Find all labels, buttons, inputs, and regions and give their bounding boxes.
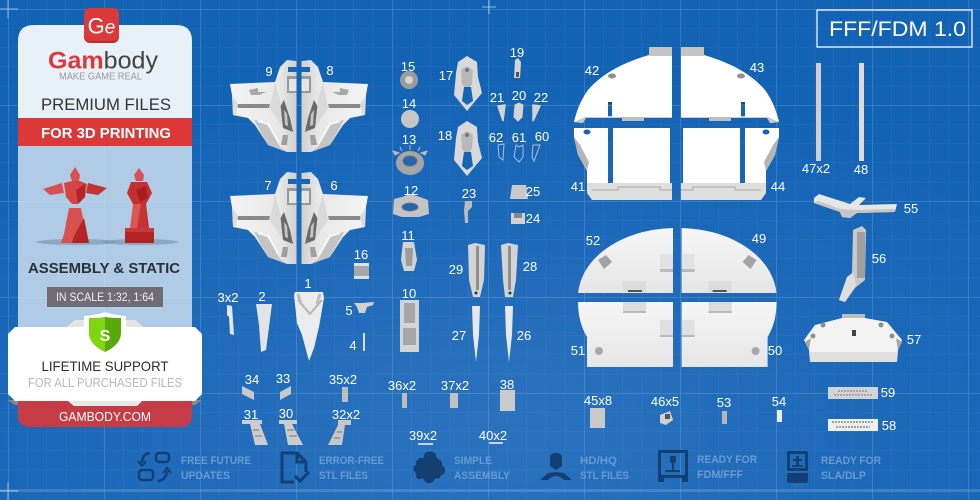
parts: heads 17 and 18: [454, 56, 482, 176]
part number labels: 27: [452, 328, 466, 343]
part number labels: 36x2: [388, 378, 416, 393]
part number labels: 35x2: [329, 372, 357, 387]
icon: update arrows: [138, 453, 171, 481]
part number labels: 31: [244, 407, 258, 422]
icon: helmet bust: [540, 453, 572, 480]
parts: small pieces 19 to 25 and 60 to 62: [464, 58, 540, 224]
scale tag: IN SCALE 1:32, 1:64: [56, 292, 155, 304]
version badge: [817, 10, 972, 47]
part number labels: 39x2: [409, 428, 437, 443]
text: for all purchased files: FOR ALL PURCHASED FILES: [28, 376, 182, 390]
part number labels: 44: [771, 179, 785, 194]
feature: ready for SLA/DLP: SLA/DLP: [821, 470, 866, 482]
feature: ready for SLA/DLP: READY FOR: [821, 455, 881, 467]
parts: small items 45, 46, 53, 54, 58, 59: [590, 387, 878, 431]
feature: simple assembly: [413, 452, 511, 483]
part number labels: 17: [439, 68, 453, 83]
version badge: FFF/FDM 1.0: [829, 18, 966, 41]
part number labels: 53: [717, 395, 731, 410]
part number labels: 6: [330, 178, 338, 193]
feature: HD/HQ STL files: STL FILES: [580, 470, 629, 482]
part number labels: 46x5: [651, 394, 679, 409]
part number labels: 4: [349, 338, 357, 353]
part number labels: 8: [326, 63, 334, 78]
part number labels: 18: [438, 128, 452, 143]
part number labels: 21: [490, 90, 504, 105]
banner: for 3D printing: FOR 3D PRINTING: [41, 125, 171, 142]
part number labels: 61: [512, 130, 526, 145]
scale tag: [47, 287, 163, 307]
part number labels: 50: [768, 343, 782, 358]
part number labels: 25: [526, 184, 540, 199]
icon: red low-poly figure standing: [102, 168, 178, 245]
part number labels: 32x2: [332, 407, 360, 422]
part number labels: 28: [523, 259, 537, 274]
part number labels: 48: [854, 162, 868, 177]
feature: ready for FDM/FFF: FDM/FFF: [697, 469, 743, 481]
heading: premium files: PREMIUM FILES: [41, 96, 171, 114]
feature: HD/HQ STL files: [540, 453, 629, 482]
part number labels: 49: [752, 231, 766, 246]
part number labels: 29: [449, 262, 463, 277]
part number labels: 10: [402, 286, 416, 301]
parts: wing sections 6 to 9: [230, 60, 368, 264]
part number labels: 33: [276, 371, 290, 386]
part number labels: 57: [907, 332, 921, 347]
feature: simple assembly: ASSEMBLY: [454, 470, 511, 482]
panel: brand card: [18, 8, 192, 336]
part number labels: 30: [279, 406, 293, 421]
part number labels: 3x2: [218, 290, 238, 305]
part number labels: 51: [571, 343, 585, 358]
part number labels: 9: [265, 64, 273, 79]
parts: blades 26 to 29: [468, 243, 518, 362]
panel: gambody.com footer: GAMBODY.COM: [59, 410, 151, 424]
part number labels: 41: [571, 179, 585, 194]
feature: error-free STL files: STL FILES: [319, 470, 368, 482]
part number labels: [218, 45, 921, 443]
parts: front pieces 1 to 5: [227, 292, 374, 361]
feature: ready for SLA/DLP: [787, 451, 881, 483]
part number labels: 34: [245, 372, 259, 387]
icon: red low-poly figure arms open: [36, 167, 116, 245]
part number labels: 11: [401, 228, 415, 243]
panel: gambody.com footer: [8, 400, 202, 427]
icon: Ge logo: [84, 8, 119, 43]
feature: HD/HQ STL files: HD/HQ: [580, 455, 617, 467]
panel: lifetime support: [8, 312, 202, 406]
part number labels: 62: [489, 130, 503, 145]
icon: Ge logo: Ge: [88, 14, 115, 38]
tagline: MAKE GAME REAL: [59, 72, 142, 82]
part number labels: 37x2: [441, 378, 469, 393]
part number labels: 22: [534, 90, 548, 105]
part number labels: 58: [882, 418, 896, 433]
part number labels: 14: [402, 96, 416, 111]
part number labels: 54: [772, 394, 786, 409]
icon: green shield: S: [100, 328, 111, 345]
part number labels: 56: [872, 251, 886, 266]
parts: lower row 30 to 40: [242, 386, 515, 445]
icon: file with check: [282, 453, 309, 482]
icon: FDM printer: [658, 450, 688, 482]
feature: error-free STL files: ERROR-FREE: [319, 455, 384, 467]
banner: for 3D printing: [18, 118, 192, 146]
part number labels: 23: [462, 186, 476, 201]
feature: ready for FDM/FFF: [658, 450, 757, 482]
part number labels: 26: [517, 328, 531, 343]
icon: SLA printer: [787, 451, 808, 483]
part number labels: 1: [304, 276, 312, 291]
part number labels: 2: [258, 289, 266, 304]
icon: puzzle piece: [413, 452, 445, 483]
logo wordmark: Gambody: [48, 48, 158, 74]
part number labels: 16: [354, 247, 368, 262]
part number labels: 47x2: [802, 161, 830, 176]
part number labels: 55: [904, 201, 918, 216]
parts: column 10 to 16: [354, 71, 429, 352]
heading: assembly and static: ASSEMBLY & STATIC: [28, 261, 181, 277]
part number labels: 45x8: [584, 393, 612, 408]
part number labels: 15: [401, 59, 415, 74]
part number labels: 24: [526, 211, 540, 226]
part number labels: 60: [535, 129, 549, 144]
part number labels: 43: [750, 60, 764, 75]
parts: dome sections 41 to 44: [574, 47, 779, 200]
part number labels: 19: [510, 45, 524, 60]
feature: simple assembly: SIMPLE: [454, 455, 492, 467]
feature: free future updates: [138, 453, 251, 482]
part number labels: 38: [500, 377, 514, 392]
part number labels: 40x2: [479, 428, 507, 443]
part number labels: 13: [402, 132, 416, 147]
icon: green shield: [84, 312, 126, 358]
part number labels: 7: [264, 178, 272, 193]
parts: floor plates 49 to 52: [578, 228, 777, 367]
feature: error-free STL files: [282, 453, 384, 482]
part number labels: 52: [586, 233, 600, 248]
part number labels: 5: [345, 303, 353, 318]
part number labels: 20: [512, 88, 526, 103]
parts: right column 47, 48, 55, 56, 57: [804, 63, 902, 362]
feature: free future updates: FREE FUTURE: [181, 455, 251, 467]
feature: free future updates: UPDATES: [181, 470, 230, 482]
part number labels: 59: [881, 385, 895, 400]
text: lifetime support: LIFETIME SUPPORT: [42, 358, 169, 374]
part number labels: 42: [585, 63, 599, 78]
feature: ready for FDM/FFF: READY FOR: [697, 454, 757, 466]
part number labels: 12: [404, 183, 418, 198]
